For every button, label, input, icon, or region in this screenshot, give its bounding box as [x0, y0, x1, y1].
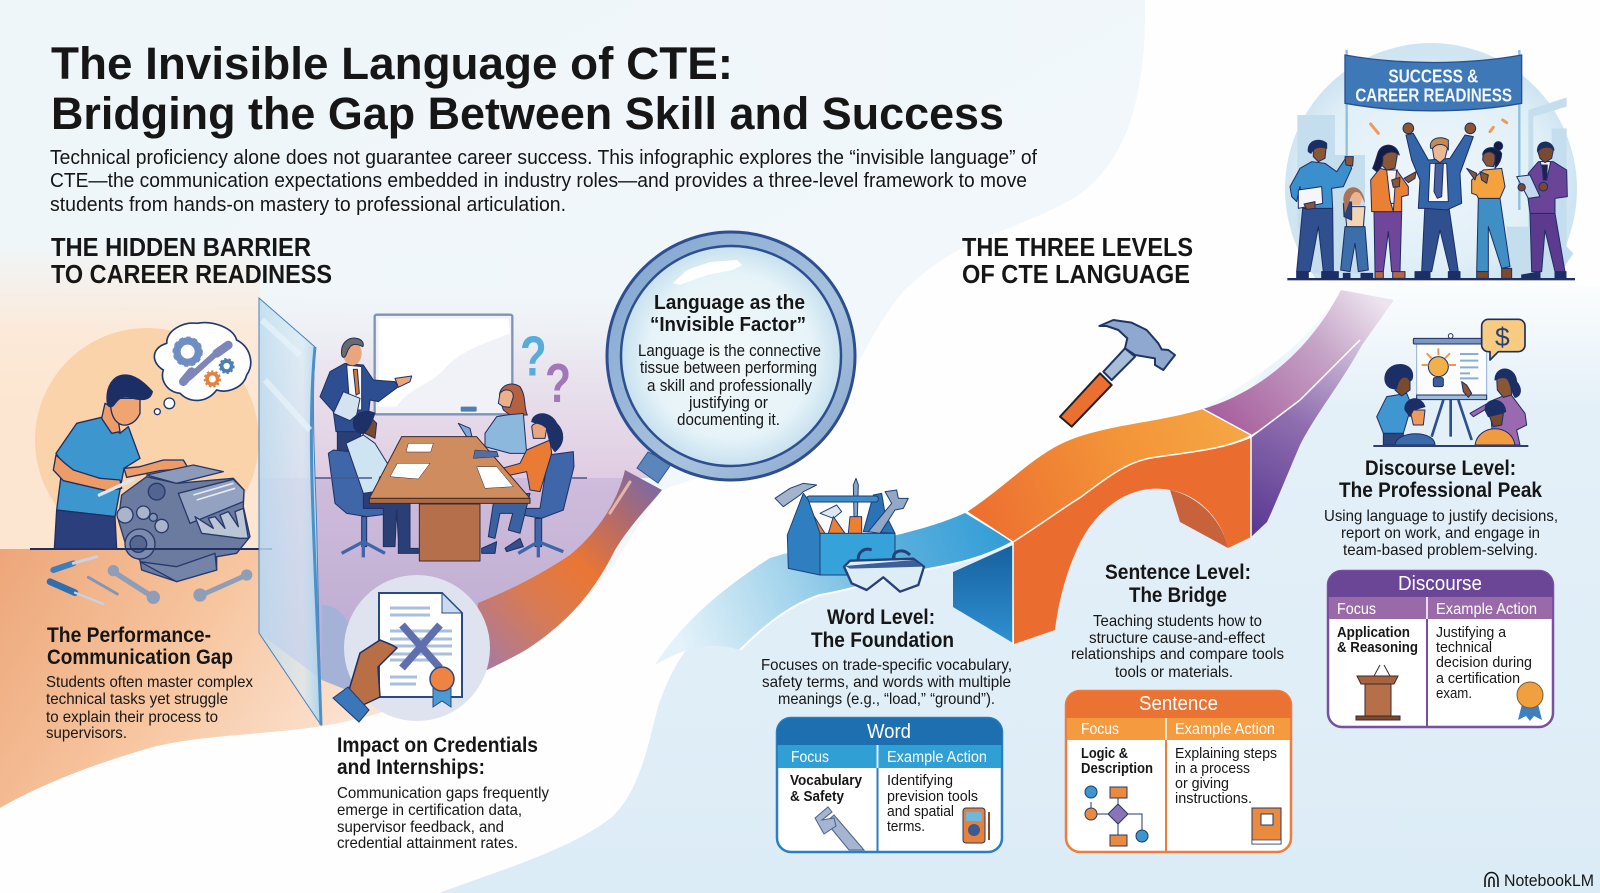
handle highlight — [610, 482, 630, 513]
table: word: Identifying — [887, 772, 953, 789]
table: word: terms. — [887, 818, 925, 835]
heading: three levels: OF CTE LANGUAGE — [962, 261, 1190, 289]
pathway: sentence bridge front — [1013, 437, 1251, 644]
table: discourse: Focus — [1337, 601, 1376, 618]
table: discourse: exam. — [1436, 685, 1472, 702]
table: discourse: Example Action — [1436, 601, 1537, 618]
pathway: word segment side — [953, 545, 1013, 643]
text: word level: Word Level: — [827, 606, 935, 629]
text: sentence level: relationships and compare tools — [1071, 646, 1284, 663]
title: The Invisible Language of CTE: — [51, 38, 733, 89]
icon: dollar speech bubble — [1482, 319, 1525, 360]
table: sentence: in a process — [1175, 760, 1250, 777]
panel: performance side background — [0, 240, 420, 830]
icon: rosette — [1517, 682, 1543, 721]
text: discourse level: Discourse Level: — [1365, 457, 1516, 480]
text: discourse level: Using language to justify decisions, — [1324, 508, 1558, 525]
illustration: presentation group — [1373, 319, 1528, 447]
ground line — [1287, 278, 1575, 280]
background: lower right blue field — [430, 285, 1600, 893]
pathway: word segment top — [655, 513, 1013, 665]
icon: engine — [117, 465, 250, 582]
confetti — [1371, 120, 1507, 133]
panel: meeting side background — [259, 285, 650, 692]
table: discourse: decision during — [1436, 654, 1532, 671]
heading: three levels — [962, 234, 1193, 289]
icon: podium — [1356, 665, 1400, 720]
table: sentence: Example Action — [1175, 721, 1275, 738]
banner: SUCCESS & — [1388, 66, 1478, 87]
heading: hidden barrier — [51, 234, 332, 289]
heading and text: performance gap: supervisors. — [46, 725, 127, 742]
skyline — [1297, 97, 1573, 279]
heading and text: credentials: Communication gaps frequently — [337, 785, 549, 802]
tools on the bench — [50, 557, 252, 604]
table: word: & Safety — [790, 788, 845, 805]
banner: CAREER READINESS — [1355, 85, 1512, 106]
pathway: purple top — [1203, 290, 1394, 435]
text: word level: safety terms, and words with multiple — [762, 674, 1011, 691]
table: word: Example Action — [887, 749, 987, 766]
table: discourse: Application — [1337, 624, 1410, 641]
lens with text: justifying or — [688, 394, 768, 412]
left listeners — [1377, 365, 1435, 445]
heading: hidden barrier: THE HIDDEN BARRIER — [51, 234, 311, 262]
banner — [1345, 55, 1522, 111]
text: sentence level: Sentence Level: — [1105, 561, 1251, 584]
heading and text: credentials — [337, 734, 549, 852]
heading and text: credentials: supervisor feedback, and — [337, 819, 504, 836]
heading and text: performance gap: Students often master complex — [46, 674, 253, 691]
badge — [433, 688, 451, 707]
lens with text: documenting it. — [677, 411, 780, 429]
text: sentence level: tools or materials. — [1115, 664, 1233, 681]
band: orange swoosh toward magnifier — [470, 470, 662, 680]
intro text: CTE—the communication expectations embedded in industry roles—and provides a three-level framework to move — [50, 170, 1027, 192]
seated person left — [346, 411, 418, 553]
center man — [1403, 123, 1476, 278]
room floor line — [315, 477, 587, 479]
man — [53, 375, 188, 549]
icon: multimeter — [963, 808, 989, 843]
table: word: Focus — [791, 749, 829, 766]
question marks — [520, 325, 571, 414]
seated woman blue — [458, 384, 527, 457]
table: discourse: technical — [1436, 639, 1492, 656]
heading and text: performance gap: to explain their process to — [46, 709, 218, 726]
table: word: Vocabulary — [790, 772, 863, 789]
text: sentence level — [1071, 561, 1284, 681]
table: sentence: Description — [1081, 760, 1153, 777]
table: sentence: Focus — [1081, 721, 1119, 738]
bench line — [30, 548, 272, 550]
chair right — [513, 452, 574, 557]
board on easel — [1413, 334, 1490, 440]
intro text: students from hands-on mastery to professional articulation. — [50, 194, 566, 216]
lens with text — [607, 232, 855, 480]
table: discourse — [1328, 571, 1553, 727]
person 1 — [1290, 140, 1353, 278]
table — [369, 437, 530, 561]
question marks: ? — [520, 325, 547, 388]
right presenter — [1462, 369, 1527, 445]
icon: toolbox and goggles — [775, 478, 924, 592]
title — [51, 38, 1004, 139]
heading and text: performance gap — [46, 624, 253, 742]
heading and text: credentials: credential attainment rates. — [337, 835, 518, 852]
hand — [349, 640, 397, 705]
illustration: success team — [1285, 43, 1577, 280]
question marks: ? — [545, 352, 571, 414]
child — [1341, 187, 1373, 278]
text: discourse level — [1324, 457, 1558, 559]
whiteboard — [375, 315, 512, 414]
table: sentence — [1066, 691, 1291, 852]
pathway: bridge inner pier — [1170, 490, 1228, 548]
lens with text: Language is the connective — [638, 342, 821, 360]
illustration: magnifying glass — [607, 232, 855, 513]
text: discourse level: report on work, and engage in — [1341, 525, 1540, 542]
icon: flowchart — [1085, 786, 1148, 846]
heading and text: performance gap: Communication Gap — [47, 646, 233, 669]
text: word level: meanings (e.g., “load,” “ground”). — [778, 691, 995, 708]
document — [379, 593, 462, 697]
backdrop circle — [1285, 43, 1577, 279]
lens with text: Language as the — [654, 292, 805, 314]
table: word: and spatial — [887, 803, 954, 820]
text: word level — [761, 606, 1012, 708]
intro text: Technical proficiency alone does not guarantee career success. This infographic explores the “invisible language” of — [50, 147, 1037, 169]
icon: caliper — [815, 807, 864, 850]
heading and text: credentials: and Internships: — [337, 756, 485, 779]
presenter — [320, 338, 412, 453]
text: sentence level: Teaching students how to — [1093, 613, 1262, 630]
seated woman orange — [482, 414, 563, 553]
table: sentence: instructions. — [1175, 790, 1252, 807]
text: discourse level: team-based problem-selving. — [1343, 542, 1538, 559]
text: word level: Focuses on trade-specific vocabulary, — [761, 657, 1012, 674]
icon: thought bubble — [154, 323, 251, 415]
ground line — [1373, 445, 1528, 447]
screwdriver in hand — [99, 479, 133, 495]
text: discourse level: The Professional Peak — [1339, 479, 1542, 502]
chair left — [328, 450, 393, 557]
logo: NotebookLM: NotebookLM — [1504, 872, 1594, 890]
lens with text: “Invisible Factor” — [650, 314, 806, 336]
handle — [637, 452, 672, 483]
illustration: glass wall — [259, 298, 321, 725]
title: Bridging the Gap Between Skill and Success — [51, 88, 1004, 139]
icon: hammer — [1060, 320, 1175, 427]
pathway: purple side — [1251, 300, 1394, 537]
table: sentence: Logic & — [1081, 745, 1128, 762]
pathway: sentence top — [967, 409, 1251, 542]
banner poles — [1347, 50, 1519, 210]
table: discourse: & Reasoning — [1337, 639, 1418, 656]
table: word — [777, 718, 1002, 852]
pathway: white edge line — [740, 542, 1013, 650]
heading and text: performance gap: The Performance- — [47, 624, 211, 647]
table: discourse: a certification — [1436, 670, 1520, 687]
table: word: Word — [867, 721, 911, 743]
heading and text: performance gap: technical tasks yet struggle — [46, 691, 228, 708]
table: sentence: Sentence — [1139, 693, 1218, 715]
heading and text: credentials: Impact on Credentials — [337, 734, 538, 757]
heading: three levels: THE THREE LEVELS — [962, 234, 1193, 262]
icon: book — [1252, 808, 1281, 844]
illustration: crossed-out credential — [333, 575, 490, 722]
text: sentence level: structure cause-and-effect — [1089, 630, 1266, 647]
table: sentence: or giving — [1175, 775, 1229, 792]
goggles — [858, 549, 910, 561]
person 2 — [1371, 145, 1416, 278]
lens with text: tissue between performing — [640, 359, 817, 377]
illustration: meeting room — [320, 315, 574, 561]
icon: dollar speech bubble: $ — [1495, 322, 1510, 352]
person 4 — [1467, 142, 1512, 278]
heading and text: credentials: emerge in certification data, — [337, 802, 522, 819]
heading: hidden barrier: TO CAREER READINESS — [51, 261, 332, 289]
table: discourse: Justifying a — [1436, 624, 1507, 641]
person 5 — [1517, 142, 1567, 278]
text: sentence level: The Bridge — [1129, 584, 1227, 607]
text: word level: The Foundation — [811, 629, 954, 652]
intro text — [50, 147, 1037, 216]
illustration: mechanic with engine — [50, 323, 252, 604]
table: word: prevision tools — [887, 788, 978, 805]
table: discourse: Discourse — [1398, 573, 1482, 595]
table: sentence: Explaining steps — [1175, 745, 1277, 762]
lens with text: a skill and professionally — [647, 377, 813, 395]
